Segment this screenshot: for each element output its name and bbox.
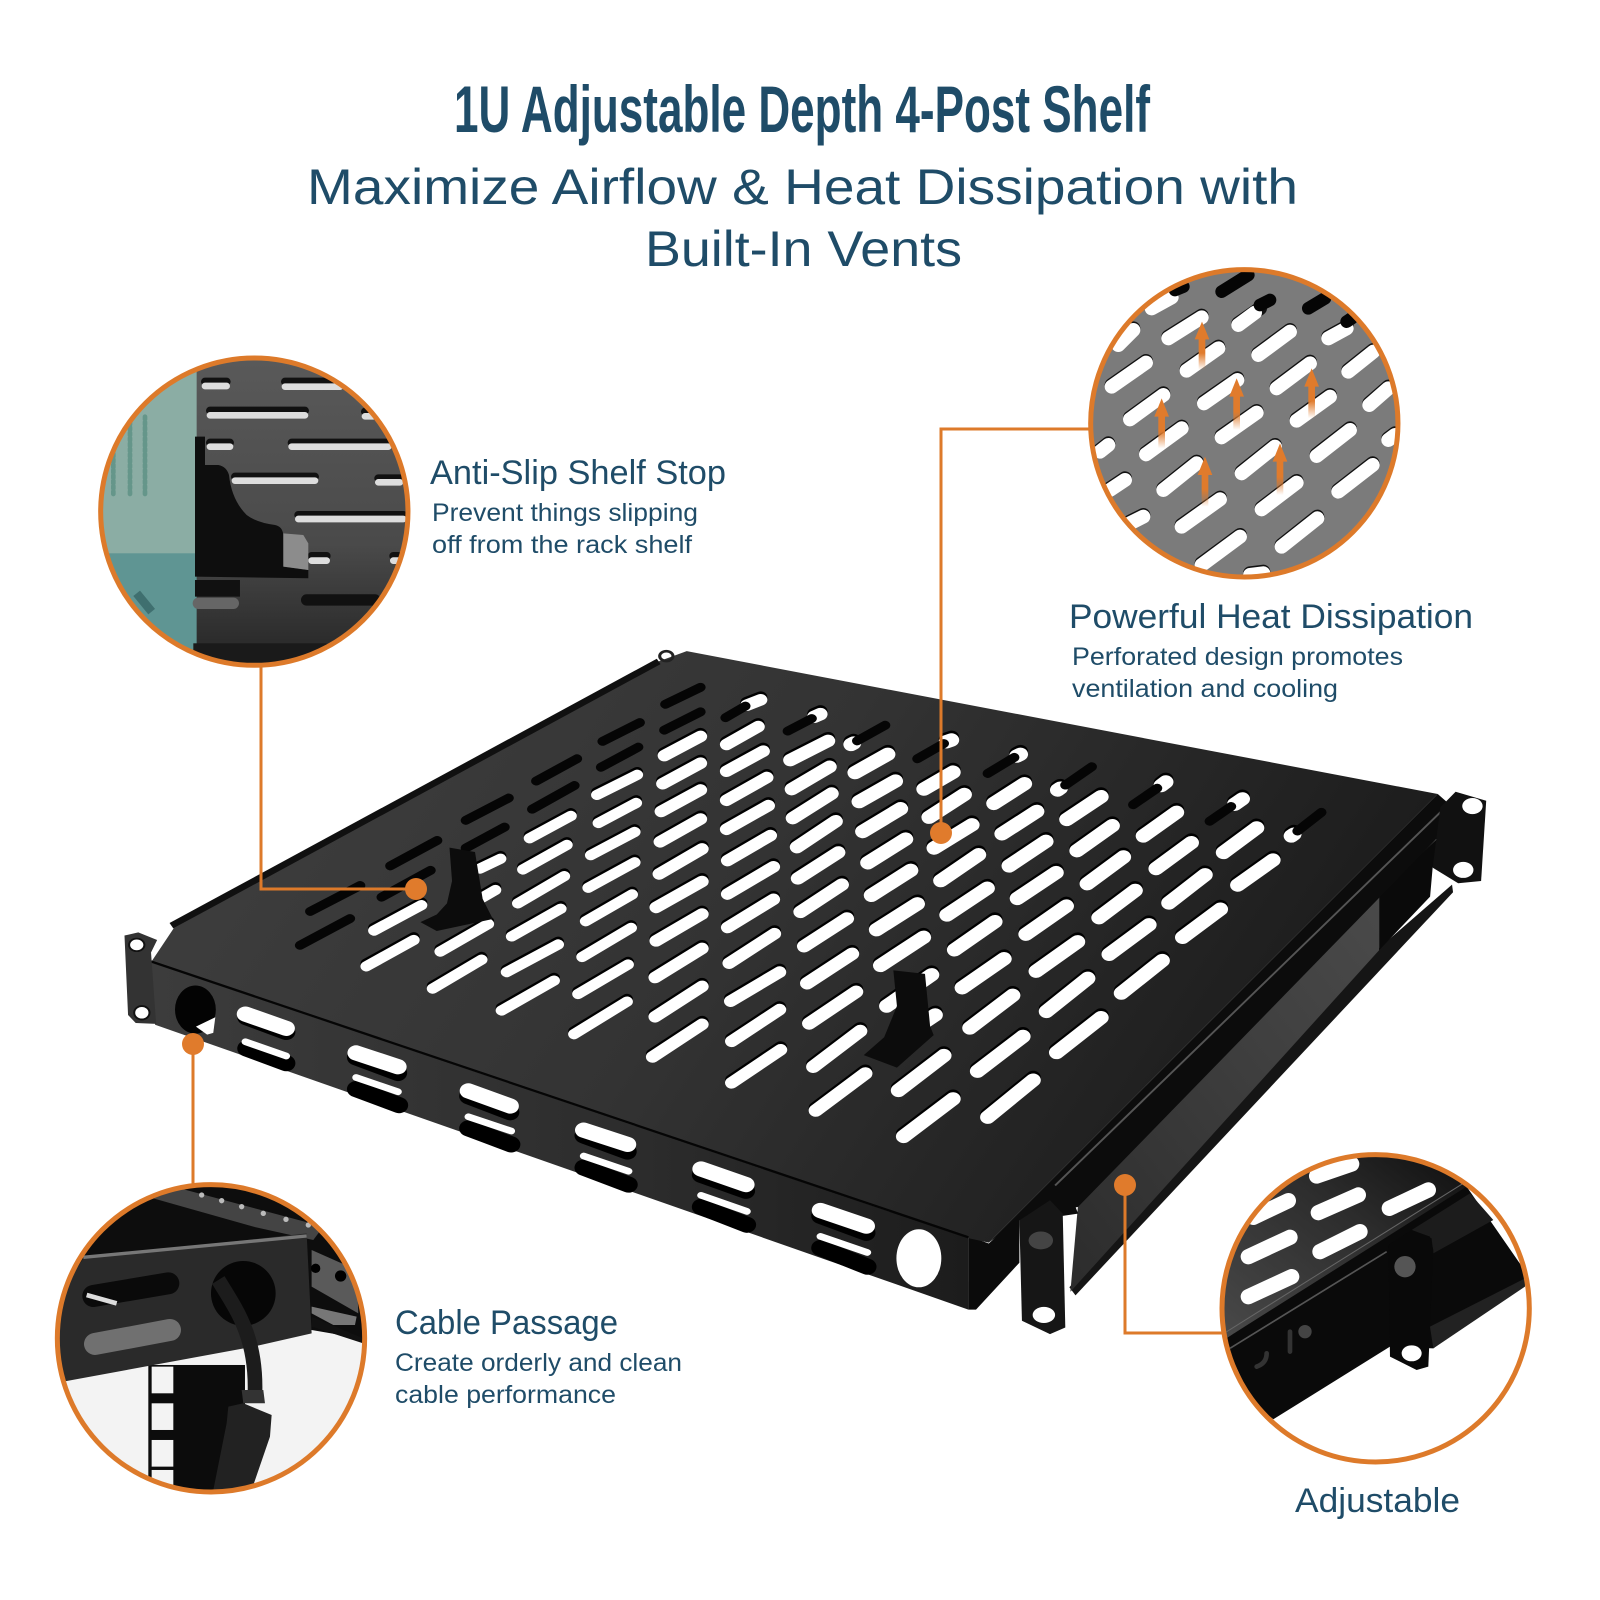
- text: heat dissipation: [1069, 598, 1473, 703]
- text: adjustable: Adjustable: [1295, 1482, 1460, 1520]
- panel: adjustable circle: [1217, 1150, 1537, 1470]
- shelf left rail: [171, 651, 673, 926]
- shelf right rail assembly: [968, 792, 1486, 1310]
- shelf stop front: [864, 970, 934, 1068]
- connector: adjustable: [1114, 1174, 1224, 1333]
- front bracket: [53, 1233, 312, 1382]
- shelf front face: [151, 961, 968, 1310]
- rack post: [148, 1365, 245, 1492]
- stop close-up: [195, 437, 308, 578]
- shelf stop rear: [420, 848, 493, 931]
- text: anti-slip: Prevent things slipping: [432, 499, 698, 527]
- front rail ear: [1019, 1200, 1065, 1334]
- bracket ear: [1388, 1230, 1433, 1370]
- subtitle: Maximize Airflow & Heat Dissipation with: [307, 159, 1298, 215]
- plate vent slots: [300, 687, 1321, 1136]
- cable hole left: [175, 986, 216, 1035]
- text: anti-slip: Anti-Slip Shelf Stop: [430, 454, 726, 492]
- text: cable passage: [395, 1304, 682, 1409]
- front face slots: [245, 1014, 867, 1267]
- shelf product: [124, 651, 1486, 1334]
- text: cable passage: cable performance: [395, 1381, 616, 1409]
- text: anti-slip: [430, 454, 726, 559]
- subtitle: Built-In Vents: [645, 221, 962, 277]
- text: heat dissipation: Perforated design promotes: [1072, 643, 1403, 671]
- title: 1U Adjustable Depth 4-Post Shelf: [454, 72, 1151, 146]
- text: heat dissipation: ventilation and cooling: [1072, 675, 1338, 703]
- panel: heat dissipation circle: [1087, 267, 1407, 587]
- connector: shelf stop: [261, 660, 427, 900]
- connector: cable passage: [182, 1033, 204, 1190]
- text: cable passage: Cable Passage: [395, 1304, 618, 1342]
- text: anti-slip: off from the rack shelf: [432, 531, 692, 559]
- connector: heat dissipation: [930, 429, 1090, 844]
- left mounting ear: [124, 932, 157, 1024]
- subtitle: [307, 159, 1298, 277]
- icon: airflow arrows: [1154, 322, 1319, 507]
- panel: cable passage circle: [53, 1180, 370, 1497]
- cable hole right: [896, 1229, 941, 1287]
- text: cable passage: Create orderly and clean: [395, 1349, 682, 1377]
- cable: [213, 1280, 272, 1490]
- shelf top plate: [151, 651, 1438, 1243]
- text: heat dissipation: Powerful Heat Dissipation: [1069, 598, 1473, 636]
- panel: anti-slip circle: [93, 350, 417, 673]
